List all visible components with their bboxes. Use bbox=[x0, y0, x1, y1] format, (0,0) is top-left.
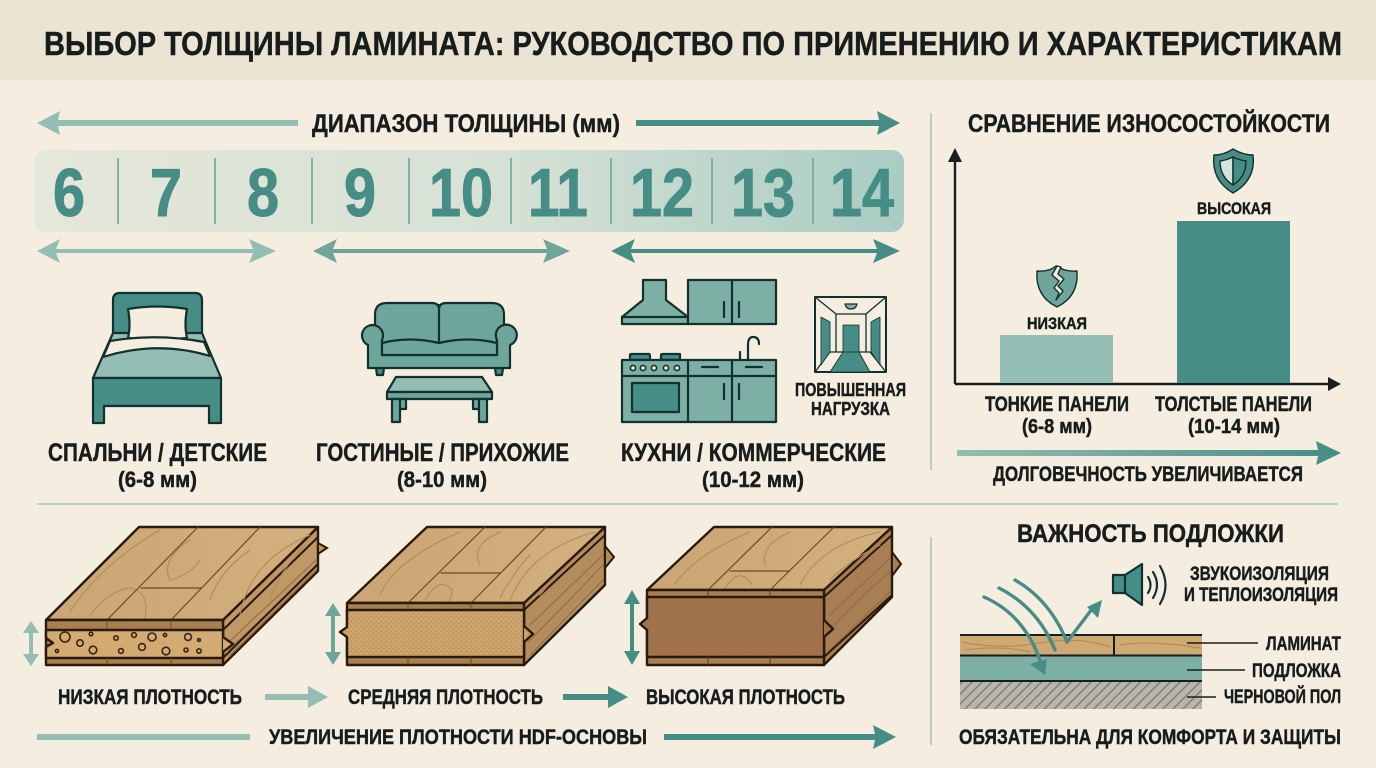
arrow: high density thickness bbox=[624, 590, 640, 665]
scale numbers: 8 bbox=[247, 155, 279, 231]
arrow: medium to high bbox=[563, 686, 628, 708]
plank: high density bbox=[640, 527, 901, 665]
label: low: НИЗКАЯ bbox=[1027, 314, 1087, 333]
label: subfloor: ЧЕРНОВОЙ ПОЛ bbox=[1224, 686, 1341, 708]
layer: laminate bbox=[960, 635, 1202, 655]
arrow: 10-14 range bbox=[611, 239, 900, 263]
thickness scale bar bbox=[34, 150, 904, 232]
label: durability increases: ДОЛГОВЕЧНОСТЬ УВЕЛИЧИВАЕТСЯ bbox=[993, 463, 1303, 486]
scale numbers: 6 bbox=[53, 155, 85, 231]
label: thick panels: ТОЛСТЫЕ ПАНЕЛИ bbox=[1155, 393, 1312, 416]
label: high density: ВЫСОКАЯ ПЛОТНОСТЬ bbox=[646, 686, 845, 709]
label: medium density: СРЕДНЯЯ ПЛОТНОСТЬ bbox=[348, 686, 543, 709]
arrow: 8-10 range bbox=[313, 239, 570, 263]
label: thick panels range: (10-14 мм) bbox=[1188, 416, 1280, 438]
label: thin panels range: (6-8 мм) bbox=[1022, 416, 1092, 438]
label: living rooms range: (8-10 мм) bbox=[397, 467, 487, 492]
scale numbers: 11 bbox=[528, 155, 588, 231]
bar: thick panels bbox=[1177, 221, 1290, 383]
icon: cracked shield bbox=[1037, 266, 1077, 307]
label: sound and heat insulation: ЗВУКОИЗОЛЯЦИЯ bbox=[1190, 564, 1329, 585]
label: high load second line: НАГРУЗКА bbox=[811, 399, 890, 419]
label: heat insulation line: И ТЕПЛОИЗОЛЯЦИЯ bbox=[1184, 585, 1338, 606]
bar: thin panels bbox=[1000, 335, 1113, 383]
panel: HDF density bbox=[23, 527, 901, 749]
icon: sofa and table bbox=[362, 303, 517, 422]
chart axes bbox=[955, 160, 1330, 384]
layer: subfloor bbox=[960, 681, 1202, 709]
header band bbox=[0, 0, 1376, 80]
heading: thickness range: ДИАПАЗОН ТОЛЩИНЫ (мм) bbox=[312, 110, 620, 138]
plank: low density bbox=[46, 527, 327, 665]
scale numbers bbox=[53, 155, 894, 231]
arrow: density right bbox=[664, 725, 896, 749]
scale numbers: 12 bbox=[630, 155, 694, 231]
panel: rooms bbox=[48, 280, 906, 492]
icon: bed bbox=[93, 293, 221, 423]
arrow: low density thickness bbox=[23, 621, 39, 666]
label: kitchens: КУХНИ / КОММЕРЧЕСКИЕ bbox=[621, 439, 886, 467]
leader lines bbox=[1187, 643, 1258, 697]
panel: wear resistance bbox=[948, 108, 1341, 486]
arrow: density left bar bbox=[37, 734, 250, 740]
label: kitchens range: (10-12 мм) bbox=[702, 467, 804, 492]
scale numbers: 13 bbox=[731, 155, 795, 231]
arrow: low to medium bbox=[265, 686, 328, 708]
label: high: ВЫСОКАЯ bbox=[1197, 199, 1271, 218]
label: HDF density increase: УВЕЛИЧЕНИЕ ПЛОТНОСТИ HDF-ОСНОВЫ bbox=[269, 726, 647, 749]
panel: thickness range bbox=[34, 110, 904, 263]
icon: strong shield bbox=[1214, 149, 1253, 193]
heading: underlayment importance: ВАЖНОСТЬ ПОДЛОЖКИ bbox=[1017, 520, 1284, 548]
arrows: sound waves bbox=[984, 580, 1092, 663]
icon: kitchen bbox=[622, 280, 776, 422]
arrow: medium density thickness bbox=[325, 603, 341, 665]
label: high load: ПОВЫШЕННАЯ bbox=[795, 380, 906, 400]
scale numbers: 14 bbox=[830, 155, 894, 231]
arrow: range left bbox=[37, 111, 298, 135]
layer outlines bbox=[960, 635, 1202, 681]
layer: underlay bbox=[960, 655, 1202, 681]
icon: speaker bbox=[1113, 564, 1166, 605]
label: living rooms: ГОСТИНЫЕ / ПРИХОЖИЕ bbox=[316, 439, 569, 467]
icon: corridor bbox=[815, 297, 886, 372]
label: thin panels: ТОНКИЕ ПАНЕЛИ bbox=[985, 393, 1129, 416]
scale numbers: 7 bbox=[150, 155, 182, 231]
scale numbers: 10 bbox=[429, 155, 493, 231]
arrow: range right bbox=[636, 111, 900, 135]
arrow: durability bbox=[957, 441, 1341, 465]
plank: medium density bbox=[340, 527, 614, 665]
arrow: 6-8 range bbox=[37, 239, 276, 263]
label: underlay: ПОДЛОЖКА bbox=[1252, 661, 1341, 682]
label: laminate: ЛАМИНАТ bbox=[1266, 634, 1341, 655]
arrowheads: sound waves bbox=[1030, 600, 1102, 675]
scale separators bbox=[118, 158, 813, 224]
panel: underlayment bbox=[959, 520, 1341, 749]
scale numbers: 9 bbox=[344, 155, 376, 231]
label: bedrooms: СПАЛЬНИ / ДЕТСКИЕ bbox=[48, 439, 267, 467]
label: low density: НИЗКАЯ ПЛОТНОСТЬ bbox=[58, 686, 242, 709]
label: bedrooms range: (6-8 мм) bbox=[118, 467, 197, 492]
